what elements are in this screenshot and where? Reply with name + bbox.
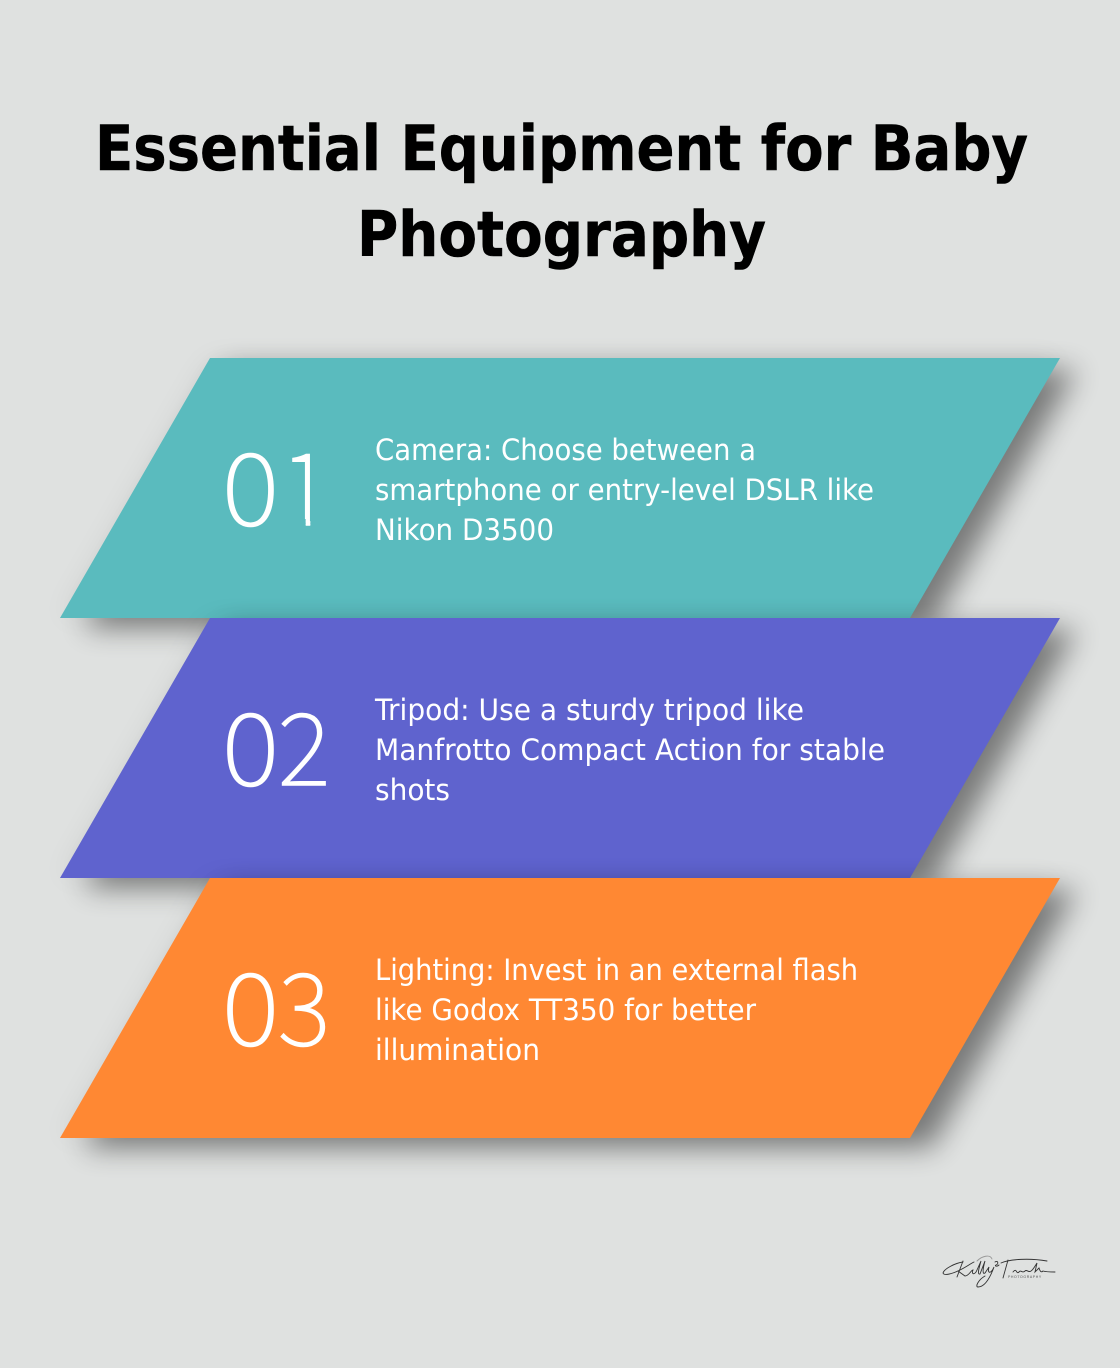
band: orange parallelogram bbox=[60, 878, 1060, 1138]
panel: 02 tripod bbox=[60, 618, 1077, 888]
text: lighting: Lighting: Invest in an external flash bbox=[375, 953, 858, 987]
text: camera bbox=[375, 433, 874, 547]
text: lighting bbox=[375, 953, 858, 1067]
panel: 01 camera bbox=[60, 358, 1077, 628]
number 01: 1 bbox=[280, 409, 332, 554]
number 03: 3 bbox=[278, 929, 330, 1074]
number 02: 0 bbox=[222, 669, 279, 814]
number 03 bbox=[222, 929, 330, 1074]
band: purple parallelogram bbox=[60, 618, 1060, 878]
number 02 bbox=[222, 669, 330, 814]
text: tripod bbox=[374, 693, 885, 807]
text: tripod: shots bbox=[375, 773, 450, 807]
text: tripod: Manfrotto Compact Action for stable bbox=[375, 733, 885, 767]
title: Photography bbox=[357, 198, 766, 271]
text: camera: Camera: Choose between a bbox=[375, 433, 756, 467]
title bbox=[95, 112, 1028, 271]
logo: wordmark: PHOTOGRAPHY bbox=[1008, 1275, 1042, 1279]
number 01 bbox=[227, 452, 310, 528]
text: camera: Nikon D3500 bbox=[375, 513, 554, 547]
number 03: 0 bbox=[222, 929, 279, 1074]
title: Essential Equipment for Baby bbox=[95, 112, 1028, 185]
logo: signature bbox=[943, 1256, 1055, 1287]
text: lighting: illumination bbox=[375, 1033, 540, 1067]
number 01: 0 bbox=[222, 409, 279, 554]
text: lighting: like Godox TT350 for better bbox=[375, 993, 757, 1027]
panel: 03 lighting bbox=[60, 878, 1077, 1148]
band: teal parallelogram bbox=[60, 358, 1060, 618]
text: camera: smartphone or entry-level DSLR like bbox=[375, 473, 874, 507]
text: tripod: Tripod: Use a sturdy tripod like bbox=[374, 693, 804, 727]
number 02: 2 bbox=[278, 669, 330, 814]
